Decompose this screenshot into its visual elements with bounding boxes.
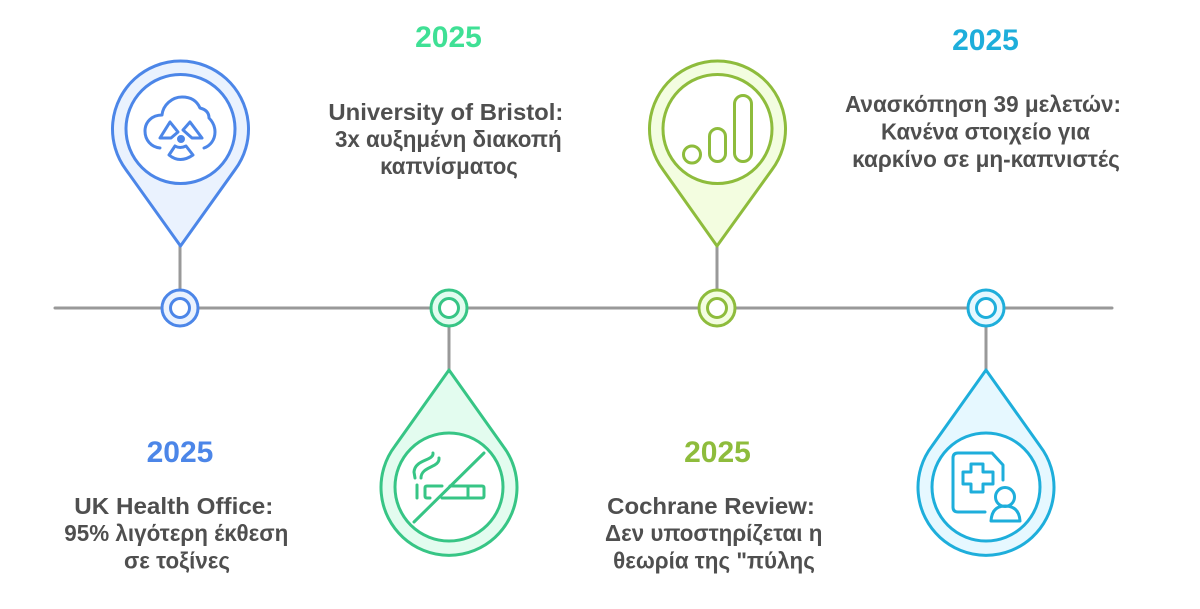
- node 2: [431, 290, 467, 326]
- year 3: 2025: [684, 436, 751, 469]
- drop marker 2: [381, 370, 517, 555]
- description 3: θεωρία της "πύλης: [613, 548, 815, 574]
- description 1: σε τοξίνες: [124, 548, 230, 574]
- drop marker 4: [918, 370, 1054, 555]
- year 4: 2025: [952, 24, 1019, 57]
- description 4: καρκίνο σε μη-καπνιστές: [852, 146, 1120, 172]
- description 4: Ανασκόπηση 39 μελετών:: [845, 91, 1121, 117]
- pin inner circle 1: [126, 74, 235, 184]
- description 3: [605, 493, 822, 574]
- description 2: [328, 99, 563, 179]
- drop inner circle 4: [932, 433, 1040, 541]
- connector 3: [716, 246, 718, 292]
- pin inner circle 3: [663, 74, 772, 184]
- connector 2: [448, 324, 450, 370]
- description 1: UK Health Office:: [74, 493, 273, 519]
- description 4: Κανένα στοιχείο για: [881, 118, 1090, 144]
- node 4: [968, 290, 1004, 326]
- timeline axis: [55, 306, 1112, 310]
- pin marker 1: [112, 61, 249, 246]
- description 2: καπνίσματος: [380, 153, 518, 179]
- pin marker 3: [650, 61, 786, 246]
- icon: medical file and person: [953, 453, 1020, 521]
- description 2: 3x αυξημένη διακοπή: [335, 126, 562, 152]
- connector 4: [984, 324, 988, 370]
- description 2: University of Bristol:: [328, 99, 563, 125]
- description 4: [845, 91, 1121, 172]
- description 1: 95% λιγότερη έκθεση: [64, 520, 288, 546]
- node 3: [699, 290, 735, 326]
- icon: no smoking: [414, 453, 484, 522]
- description 3: Cochrane Review:: [607, 493, 815, 519]
- description 3: Δεν υποστηρίζεται η: [605, 520, 822, 546]
- icon: radioactive cloud: [145, 97, 215, 160]
- connector 1: [178, 246, 182, 292]
- icon: signal bars: [684, 96, 752, 163]
- milestone 2: University of Bristol: [328, 21, 563, 555]
- year 2: 2025: [415, 21, 482, 54]
- node 1: [162, 290, 198, 326]
- milestone 3: Cochrane Review: [605, 61, 822, 573]
- milestone 1: UK Health Office: [64, 61, 288, 573]
- year 1: 2025: [147, 436, 213, 469]
- description 1: [64, 493, 288, 574]
- drop inner circle 2: [395, 433, 503, 541]
- milestone 4: 39 studies review: [845, 24, 1121, 555]
